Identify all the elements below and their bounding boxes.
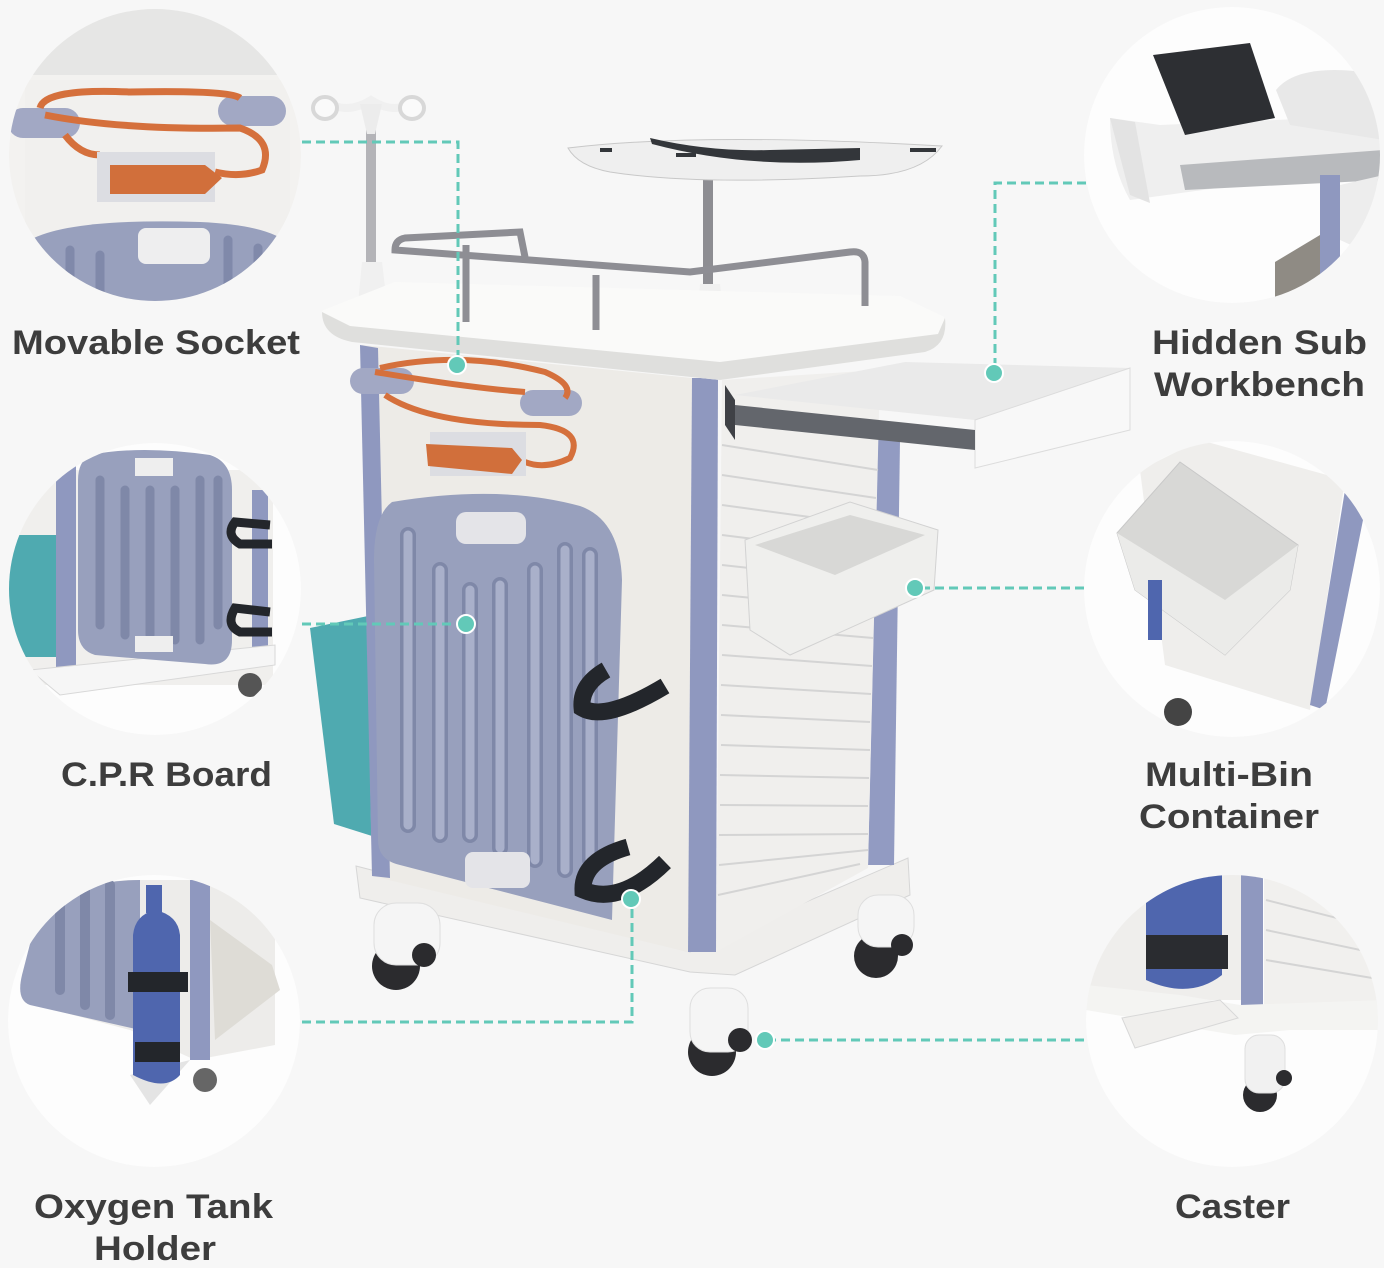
label: Oxygen Tank Holder (34, 1188, 273, 1268)
casters (372, 895, 914, 1076)
label: Oxygen Tank Holder: Holder (94, 1230, 216, 1268)
callout lines (302, 142, 1086, 1049)
label: Hidden Sub Workbench: Hidden Sub (1152, 324, 1367, 362)
label: Hidden Sub Workbench: Workbench (1154, 366, 1365, 404)
label: Movable Socket: Movable Socket (12, 324, 300, 362)
panel: CPR board (9, 450, 276, 697)
label: Multi-Bin Container: Container (1139, 798, 1319, 836)
CPR board (374, 494, 622, 920)
panel: movable socket (11, 9, 290, 301)
chrome rail (395, 232, 865, 330)
teal bin (310, 616, 372, 836)
main cart (310, 97, 1130, 1076)
panel: caster (1090, 875, 1376, 1112)
base plate (356, 858, 910, 975)
label: Oxygen Tank Holder: Oxygen Tank (34, 1188, 273, 1226)
panel: oxygen tank holder (20, 880, 280, 1104)
black straps (582, 670, 665, 894)
panel: hidden sub workbench (1110, 43, 1380, 297)
IV pole (313, 97, 424, 304)
sliding shelf (725, 362, 1130, 468)
top surface (322, 284, 945, 380)
label: C.P.R Board: C.P.R Board (61, 756, 272, 794)
blue strips (360, 345, 390, 878)
rear side strip (868, 440, 900, 865)
panel: multi-bin container (1116, 443, 1363, 726)
label: Caster: Caster (1175, 1188, 1290, 1226)
label: Multi-Bin Container (1139, 756, 1319, 836)
label: Hidden Sub Workbench (1152, 324, 1367, 404)
side bin (745, 502, 938, 655)
upper tray (568, 138, 942, 334)
right slatted side panel (716, 370, 880, 952)
label: Multi-Bin Container: Multi-Bin (1145, 756, 1313, 794)
front panel (362, 345, 692, 952)
orange cord and socket (350, 360, 582, 476)
